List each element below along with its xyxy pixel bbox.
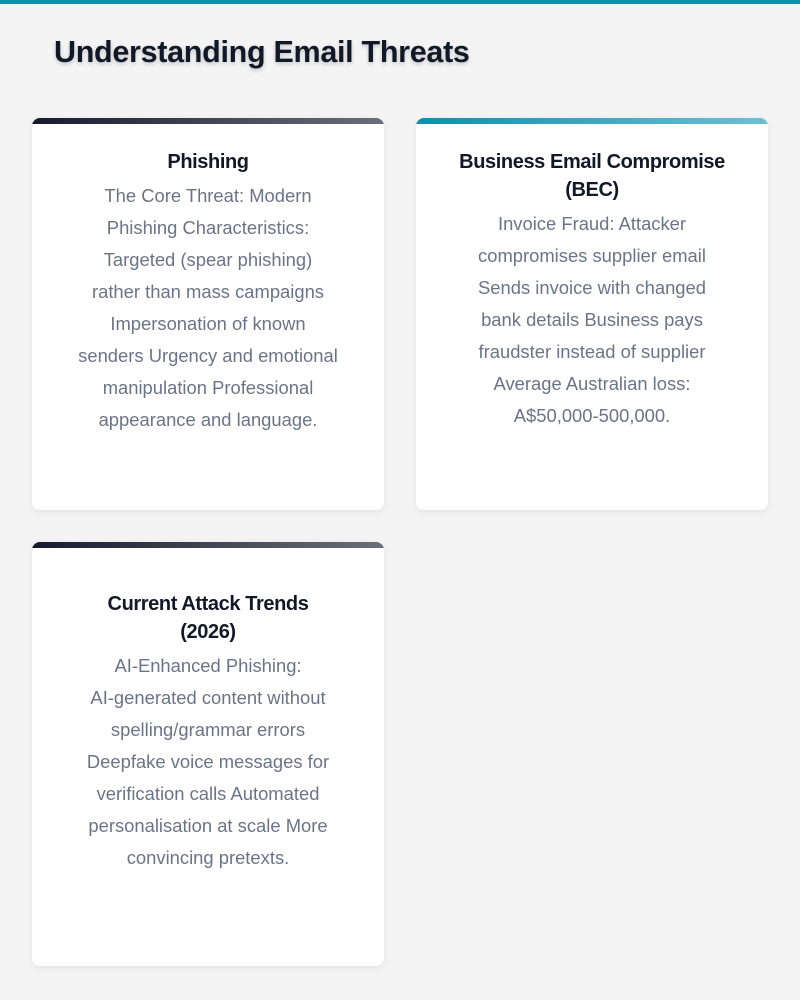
text: phishing body: senders Urgency and emotional bbox=[78, 345, 338, 366]
text: trends body: spelling/grammar errors bbox=[111, 719, 305, 740]
panel: current attack trends bbox=[32, 542, 384, 966]
heading: BEC bbox=[459, 151, 725, 201]
text: BEC body: compromises supplier email bbox=[478, 245, 706, 266]
heading: BEC: (BEC) bbox=[565, 179, 619, 201]
text: trends body: AI-Enhanced Phishing: bbox=[114, 655, 302, 676]
text: BEC body: A$50,000-500,000. bbox=[514, 405, 670, 426]
text: trends body: verification calls Automated bbox=[97, 783, 319, 804]
text: trends body: AI-generated content without bbox=[90, 687, 326, 708]
heading: BEC: Business Email Compromise bbox=[459, 151, 725, 173]
text: phishing body: Impersonation of known bbox=[110, 313, 306, 334]
text: trends body: Deepfake voice messages for bbox=[87, 751, 329, 772]
text: phishing body: appearance and language. bbox=[99, 409, 317, 430]
text: phishing body: Phishing Characteristics: bbox=[107, 217, 309, 238]
text: phishing body: rather than mass campaigns bbox=[92, 281, 324, 302]
text: phishing body bbox=[78, 185, 338, 430]
top accent bar bbox=[0, 0, 800, 4]
text: BEC body: bank details Business pays bbox=[481, 309, 703, 330]
panel: BEC bbox=[416, 118, 768, 510]
heading: phishing: Phishing bbox=[167, 151, 249, 173]
text: phishing body: The Core Threat: Modern bbox=[104, 185, 312, 206]
text: trends body: personalisation at scale More bbox=[88, 815, 328, 836]
heading: trends bbox=[108, 593, 308, 643]
text: BEC body: Sends invoice with changed bbox=[478, 277, 706, 298]
text: BEC body bbox=[478, 213, 706, 426]
heading: trends: Current Attack Trends bbox=[108, 593, 308, 615]
title: Understanding Email Threats bbox=[54, 35, 470, 69]
text: BEC body: Invoice Fraud: Attacker bbox=[498, 213, 686, 234]
text: trends body bbox=[87, 655, 329, 868]
heading: trends: (2026) bbox=[180, 621, 236, 643]
text: BEC body: Average Australian loss: bbox=[494, 373, 690, 394]
text: phishing body: manipulation Professional bbox=[103, 377, 313, 398]
text: trends body: convincing pretexts. bbox=[127, 847, 289, 868]
panel: phishing bbox=[32, 118, 384, 510]
text: phishing body: Targeted (spear phishing) bbox=[104, 249, 312, 270]
text: BEC body: fraudster instead of supplier bbox=[479, 341, 705, 362]
